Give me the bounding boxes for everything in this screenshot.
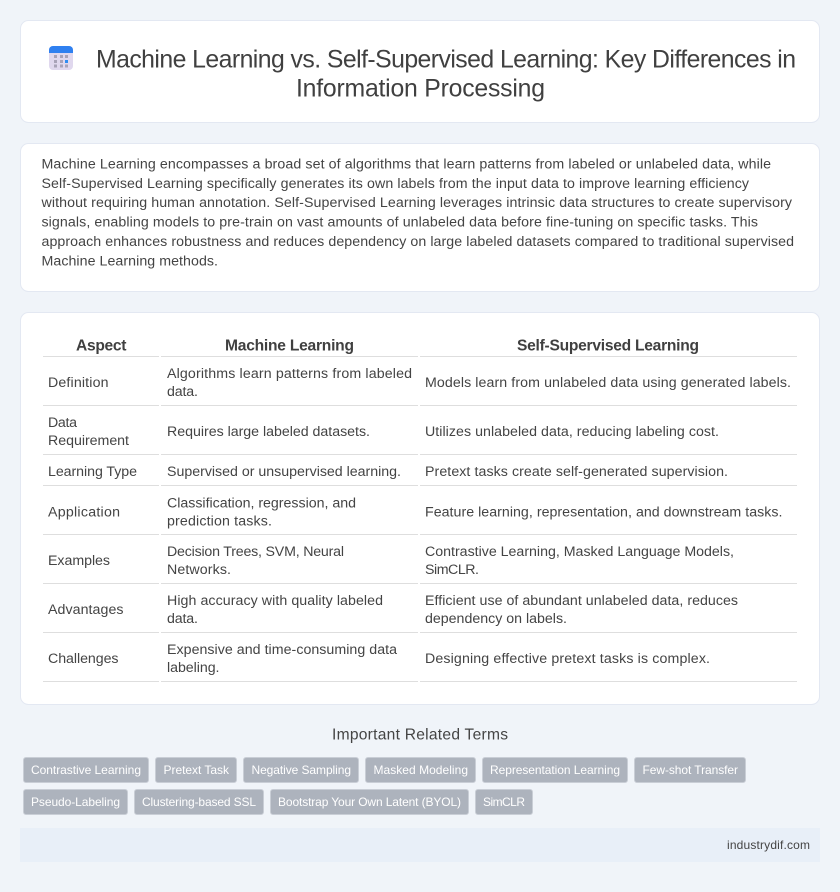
row: advantages	[48, 593, 738, 627]
footer	[20, 828, 820, 862]
row: challenges: labeling.	[167, 660, 220, 676]
row: definition: Definition	[48, 375, 108, 391]
related term tags: Representation Learning	[490, 763, 620, 777]
title: Machine Learning vs. Self-Supervised Learning: Key Differences in	[96, 46, 796, 74]
row: learning type	[48, 464, 728, 480]
row: application: prediction tasks.	[167, 514, 272, 530]
intro text block: signals, enabling models to pre-train on vast amounts of unlabeled data before fine-tuning on specific tasks. This	[42, 214, 758, 230]
row: definition: data.	[167, 384, 198, 400]
related term tags: Clustering-based SSL	[142, 795, 256, 809]
related term tags: Contrastive Learning	[31, 763, 141, 777]
related term tags	[24, 758, 746, 814]
heading: important related terms: Important Related Terms	[332, 726, 508, 744]
row: learning type: Supervised or unsupervised learning.	[167, 464, 401, 480]
table header row	[76, 338, 699, 354]
title: Information Processing	[296, 76, 545, 102]
row: application: Feature learning, representation, and downstream tasks.	[425, 504, 782, 520]
row: definition	[48, 366, 791, 400]
panel: header	[20, 20, 820, 122]
related term tags: Pseudo-Labeling	[31, 795, 120, 809]
panel: introduction	[20, 144, 820, 292]
related term tags: Negative Sampling	[252, 763, 351, 777]
row: application: Classification, regression, and	[167, 496, 356, 512]
related term tags: SimCLR	[483, 795, 525, 809]
row: challenges: Expensive and time-consuming data	[167, 642, 397, 658]
row: examples: Decision Trees, SVM, Neural	[167, 544, 344, 560]
title	[96, 46, 796, 102]
row: advantages: Efficient use of abundant unlabeled data, reduces	[425, 593, 738, 609]
related term tags: Masked Modeling	[374, 763, 468, 777]
row: challenges	[48, 642, 710, 676]
row: challenges: Designing effective pretext tasks is complex.	[425, 651, 710, 667]
footer: industrydif.com	[727, 838, 810, 852]
row: advantages: High accuracy with quality labeled	[167, 593, 383, 609]
row: learning type: Pretext tasks create self-generated supervision.	[425, 464, 728, 480]
row: examples: Networks.	[167, 562, 231, 578]
intro text block: Machine Learning encompasses a broad set of algorithms that learn patterns from labeled or unlabeled data, while	[42, 156, 771, 172]
row: learning type: Learning Type	[48, 464, 137, 480]
related term tags: Bootstrap Your Own Latent (BYOL)	[278, 795, 461, 809]
row: application	[48, 496, 782, 530]
table header row: Aspect	[76, 338, 126, 354]
row: examples: Contrastive Learning, Masked Language Models,	[425, 544, 734, 560]
row: examples: Examples	[48, 553, 110, 569]
row: data requirement	[48, 415, 719, 449]
row: definition: Models learn from unlabeled data using generated labels.	[425, 375, 791, 391]
intro text block: Machine Learning methods.	[42, 254, 218, 270]
row: data requirement: Utilizes unlabeled data, reducing labeling cost.	[425, 424, 719, 440]
row: challenges: Challenges	[48, 651, 118, 667]
row: advantages: Advantages	[48, 602, 124, 618]
table header row: Machine Learning	[225, 338, 354, 354]
intro text block: Self-Supervised Learning specifically generates its own labels from the input data to improve learning efficiency	[42, 176, 750, 192]
row: data requirement: Requirement	[48, 433, 129, 449]
related term tags: Pretext Task	[164, 763, 230, 777]
row: data requirement: Requires large labeled datasets.	[167, 424, 370, 440]
intro text block	[40, 156, 794, 270]
row: data requirement: Data	[48, 415, 77, 431]
row: advantages: data.	[167, 611, 198, 627]
icon: calendar	[49, 46, 73, 70]
row: examples: SimCLR.	[425, 562, 479, 578]
row: definition: Algorithms learn patterns from labeled	[167, 366, 412, 382]
row: examples	[48, 544, 734, 578]
panel: comparison table	[20, 312, 820, 704]
intro text block: approach enhances robustness and reduces dependency on large labeled datasets compared to traditional supervised	[42, 234, 794, 250]
row: advantages: dependency on labels.	[425, 611, 567, 627]
related term tags: Few-shot Transfer	[642, 763, 738, 777]
row: application: Application	[48, 504, 120, 520]
intro text block: without requiring human annotation. Self-Supervised Learning leverages intrinsic data structures to create supervisory	[40, 195, 793, 211]
table header row: Self-Supervised Learning	[517, 338, 699, 354]
